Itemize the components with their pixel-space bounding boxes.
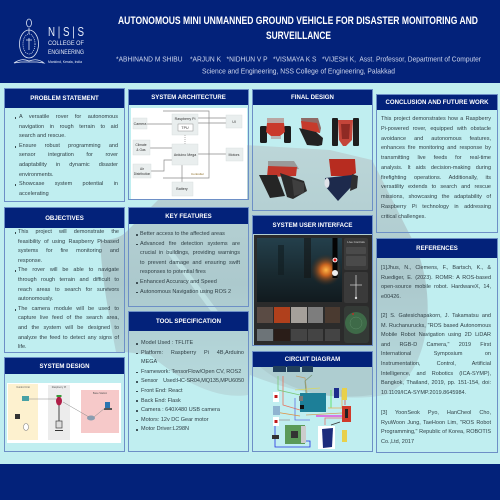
text: conclusion [381, 116, 492, 220]
raspberry pi board [285, 425, 306, 444]
text: objectives bullets: This project will demonstrate the [18, 229, 119, 235]
text: problem bullets: adaptability in dynamic disaster [19, 162, 118, 168]
heading: objectives [5, 208, 124, 228]
text: objectives bullets [15, 229, 120, 350]
arduino board [299, 393, 326, 412]
text: conclusion: Raspberry Pi technology in addressing [381, 204, 491, 210]
text: tool list: Model Used : TFLITE [141, 340, 193, 346]
diagram: architecture [131, 108, 247, 199]
heading: final design [253, 90, 372, 105]
text: reference 2: and RGB-D Camera," 2019 First [381, 342, 491, 348]
text: reference 2 [381, 313, 491, 396]
box: air distribution [133, 164, 151, 178]
box: raspberry pi: Raspberry Pi [175, 117, 196, 121]
control group zone: Control Unit [16, 386, 30, 389]
panel: references [376, 238, 498, 453]
main camera feed [257, 238, 342, 302]
text: features bullets: responses to potential fires [140, 269, 206, 275]
text: features bullets: Enhanced Accuracy and Speed [140, 279, 217, 285]
text: tool list: Platform: Raspberry Pi 4B,Arduino [141, 350, 244, 356]
text: objectives bullets: response. [18, 258, 42, 264]
college logo [14, 18, 84, 64]
yellow motors [342, 388, 347, 442]
panel: system design [4, 357, 125, 452]
text: reference 2: M. Ruchanurucks, "ROS based Autonomous [381, 323, 491, 329]
text: problem bullets: Ensure robust programming and [19, 143, 118, 149]
text: features bullets: Better access to the affected areas [140, 231, 225, 237]
text: features bullets [136, 231, 240, 295]
ultrasonic connectors [273, 366, 313, 372]
text: objectives bullets: and the system will be designed to [18, 325, 119, 331]
text: conclusion: transmitting live feeds for real-time [381, 155, 491, 161]
heading: key features: KEY FEATURES [165, 212, 212, 220]
title: SURVEILLANCE [266, 30, 331, 42]
heading: circuit diagram [253, 352, 372, 367]
authors: *ABHINAND M SHIBU *ARJUN K *NIDHUN V P *VISMAYA K S *VIJESH K, Asst. Professor, Department of Computer [116, 56, 482, 64]
wires [275, 375, 345, 447]
heading: circuit diagram: CIRCUIT DIAGRAM [285, 356, 340, 363]
heading: conclusion: CONCLUSION AND FUTURE WORK [385, 99, 489, 106]
text: conclusion: avoidance and autonomous features, [381, 136, 491, 142]
link lines [29, 399, 105, 417]
text: tool list: Sensor Used:HC-SR04,MQ135,MPU6050 [141, 378, 244, 384]
panel: system user interface [252, 215, 373, 346]
box: camera: Camera [134, 122, 146, 126]
status panel: Live Controls [347, 240, 365, 244]
text: conclusion: analysis. It aids decision-making during [381, 165, 491, 171]
authors: Science and Engineering, NSS College of Engineering, Palakkad [202, 68, 395, 76]
college name: Mankind, Kerala, India [48, 60, 82, 64]
text: problem bullets: A versatile rover for autonomous [19, 114, 118, 120]
text: reference 1: Ruediger, E. (2023). ROMR: A ROS-based [381, 275, 491, 281]
text: conclusion: enhances fire monitoring and response by [381, 145, 491, 151]
text: objectives bullets: autonomously. [18, 296, 53, 302]
text: tool list: Camera : 640X480 USB camera [141, 407, 220, 413]
text: conclusion: versatility extends to search and rescue [381, 184, 491, 190]
box: air distribution: Air [140, 167, 145, 171]
remote group zone: Base Station [93, 392, 108, 395]
header band [0, 0, 500, 83]
text: reference 2: International Symposium on [381, 351, 491, 357]
image thumbnails [257, 307, 340, 341]
text: objectives bullets: systems for fire monitoring and [18, 248, 119, 254]
rover: top view [332, 118, 359, 146]
box: climate: & Gas [136, 148, 146, 152]
text: reference 2: Intelligence, and Robotics (ICA-SYMP), [381, 371, 491, 377]
text: reference 3: RyuWoon Jung, TaeHoon Lim, "ROS Robot [381, 420, 491, 426]
box: climate [133, 140, 150, 155]
panel: key features [128, 207, 249, 307]
rover: three-quarter view [259, 161, 307, 199]
text: reference 1: [1]Jhus, N., Clemens, F., Bartsch, K., & [381, 265, 491, 271]
text: reference 1: e00426. [381, 294, 401, 300]
slider control [332, 238, 338, 278]
box: LI: UI [232, 120, 236, 124]
text: features bullets: Autonomous Navigation using ROS 2 [140, 289, 231, 295]
box: motors: Motors [229, 153, 240, 157]
text: reference 2: Instrumentation, Control, Artificial [381, 361, 491, 367]
heading: objectives: OBJECTIVES [45, 214, 84, 222]
text: reference 3: Programming," Republic of Korea, ROBOTIS [381, 429, 491, 435]
heading: system design [5, 358, 124, 374]
text: tool list: Front End: React [141, 388, 183, 394]
text: objectives bullets: feasibility of using Raspberry Pi-based [18, 239, 119, 245]
text: reference 3 [381, 410, 491, 445]
text: reference 1: open-source mobile robot. HardwareX, 14, [381, 284, 491, 290]
panel: final design [252, 89, 373, 211]
heading: tool specification [129, 312, 248, 331]
direction pad [344, 272, 368, 303]
heading: final design: FINAL DESIGN [291, 94, 334, 101]
rover: camera view [324, 159, 358, 201]
text: problem bullets: Showcase system potential in [19, 181, 118, 187]
heading: key features [129, 208, 248, 224]
text: objectives bullets: analyze the feed to detect any signs of [18, 335, 119, 341]
college name: COLLEGE OF [48, 40, 84, 47]
text: objectives bullets: The rover will be able to navigate [18, 267, 119, 273]
text: reference 2: Bangkok, Thailand, 2019, pp. 151-154, doi: [381, 380, 491, 386]
college name [48, 24, 84, 64]
text: problem bullets: sensor integration for rover [19, 152, 118, 158]
heading: system architecture: SYSTEM ARCHITECTURE [151, 94, 226, 101]
box: air distribution: Distribution [134, 172, 150, 176]
rover: front view [260, 118, 291, 143]
text: reference 3: [3] YoonSeok Pyo, HanCheol Cho, [381, 410, 491, 416]
text: reference 1 [381, 265, 491, 300]
box: raspberry pi: TPU [181, 126, 189, 130]
motor driver [342, 406, 351, 422]
heading: conclusion [377, 95, 497, 110]
text: tool list: Motor Driver:L298N [141, 426, 189, 432]
panel: tool specification [128, 311, 249, 452]
heading: system user interface: SYSTEM USER INTERFACE [273, 222, 352, 228]
text: problem bullets: navigation in rough terrain to aid [19, 124, 118, 130]
radar [344, 306, 369, 343]
text: objectives bullets: life. [18, 344, 27, 350]
text: conclusion: Pi-powered rover, equipped with obstacle [381, 126, 491, 132]
text: problem bullets: accelerating [19, 191, 49, 197]
text: tool list: Back End: Flask [141, 398, 181, 404]
text: tool list: Motors: 12v DC Gear motor [141, 417, 209, 423]
panel: system architecture [128, 89, 249, 200]
heading: system architecture [129, 90, 248, 105]
text: features bullets: to prevent damage and ensuring swift [140, 260, 240, 266]
heading: tool specification: TOOL SPECIFICATION [156, 318, 221, 325]
battery pack [318, 426, 335, 449]
dashboard screenshot [254, 235, 372, 345]
text: problem bullets: search and rescue. [19, 133, 66, 139]
box: arduino: Arduino Mega [174, 153, 196, 157]
text: reference 2: [2] S. Gatesichapakorn, J. Takamatsu and [381, 313, 491, 319]
text: problem bullets [15, 114, 118, 197]
circuit wiring [272, 366, 351, 449]
rover: side view [299, 118, 323, 146]
text: conclusion: critical challenges. [381, 214, 426, 220]
box: battery: Battery [176, 187, 188, 191]
heading: problem statement: PROBLEM STATEMENT [30, 95, 99, 102]
heading: references [377, 239, 497, 258]
text: tool list: MEGA [141, 359, 157, 365]
text: reference 2: Mobile Robot Navigation using 2D LiDAR [381, 332, 491, 338]
processing group zone: Raspberry Pi [52, 386, 67, 389]
text: objectives bullets: reach areas to search for survivors [18, 287, 119, 293]
authors [116, 56, 482, 76]
heading: problem statement [5, 89, 124, 108]
text: features bullets: crucial in buildings, providing warnings [140, 250, 240, 256]
panel: circuit diagram [252, 351, 373, 452]
text: conclusion: missions, showcasing the adaptability of [381, 194, 491, 200]
heading: system user interface [253, 216, 372, 234]
box: climate: Climate [135, 143, 147, 147]
text: problem bullets: environments. [19, 172, 54, 178]
diagram: architecture: Controller [191, 172, 204, 176]
heading: system design: SYSTEM DESIGN [39, 362, 90, 370]
text: conclusion: This project demonstrates how a Raspberry [381, 116, 491, 122]
heading: references: REFERENCES [416, 245, 458, 252]
panel: objectives [4, 207, 125, 353]
title [118, 15, 478, 42]
text: objectives bullets: The camera module will be used to [18, 306, 119, 312]
text: objectives bullets: through rough terrain and difficult to [18, 277, 119, 283]
text: tool list: Framework: TensorFlow/Open CV, ROS2 [141, 369, 241, 375]
box: raspberry pi [172, 114, 198, 135]
panel: conclusion and future work [376, 94, 498, 233]
panel: problem statement [4, 88, 125, 202]
diagram: system design [7, 383, 121, 443]
rover renders [259, 118, 359, 201]
small sensors [272, 388, 339, 439]
text: features bullets: Advanced fire detection systems are [140, 241, 240, 247]
text: reference 2: 10.1109/ICA-SYMP.2019.8645984. [381, 390, 466, 396]
emblem [14, 19, 44, 63]
footer band [0, 464, 500, 500]
text: tool list [136, 340, 244, 432]
text: conclusion: firefighting operations. Additionally, its [381, 175, 491, 181]
text: objectives bullets: capture live feed of the search area, [18, 315, 119, 321]
text: reference 3: Co.,Ltd, 2017 [381, 439, 414, 445]
